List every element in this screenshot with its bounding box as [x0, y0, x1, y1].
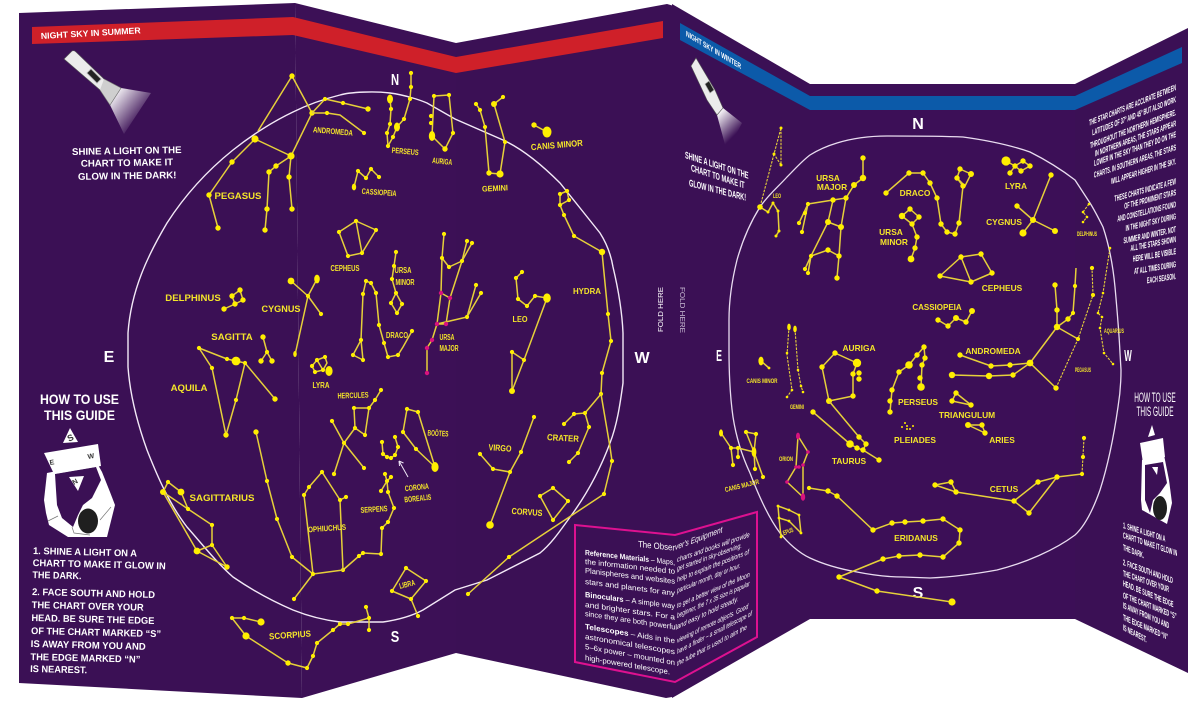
callout body text: left fold: 5–6x power – mounted on: [585, 642, 675, 667]
constellation: winter Triangulum: [939, 393, 995, 420]
constellation: Hercules: HERCULES: [337, 390, 369, 401]
text: star chart accuracy note: IN NORTHERN AREAS, THE STARS APPEAR: [1095, 120, 1176, 159]
text: star chart accuracy note: THE STAR CHARTS ARE ACCURATE BETWEEN: [1089, 84, 1176, 128]
text: winter numbered steps: 2. FACE SOUTH AND HOLD: [1123, 559, 1173, 586]
text: numbered steps: THE CHART OVER YOUR: [32, 600, 144, 614]
text: winter numbered steps: OF THE CHART MARKED “S”: [1123, 592, 1177, 622]
constellation: Perseus: [387, 73, 419, 157]
winter band title: NIGHT SKY IN WINTER: [686, 30, 741, 71]
callout body text: left fold: Binoculars – A simple way: [585, 590, 675, 611]
constellation: winter Ursa Minor: [879, 209, 919, 262]
callout title: [638, 524, 723, 553]
constellation: winter Aries: [965, 422, 1015, 445]
constellation: winter Lyra: [1001, 156, 1030, 191]
constellation: Auriga: AURIGA: [432, 156, 453, 167]
callout title: ver's Equipment: [675, 524, 723, 552]
text: winter numbered steps: 1. SHINE A LIGHT ON A: [1123, 522, 1165, 544]
constellation: Corvus: [511, 488, 568, 520]
callout body text: right fold: get started in sky-observing.: [677, 542, 742, 573]
constellation: Ophiuchus: OPHIUCHUS: [308, 523, 347, 534]
constellation: Ursa Minor: [391, 252, 415, 313]
constellation: Lyra: LYRA: [312, 381, 330, 390]
callout body text: right fold: viewing of remote objects. Good: [677, 603, 748, 645]
constellation: Cassiopeia: [352, 169, 397, 198]
text: prominent stars note: AND CONSTELLATIONS FOUND: [1117, 201, 1176, 224]
callout body text: right fold: to get a better view of the Moon: [677, 571, 750, 610]
constellation: Gemini: GEMINI: [482, 183, 508, 194]
callout body text: left fold: since they are both powerful: [585, 609, 677, 632]
constellation: winter Lepus: [778, 506, 801, 538]
constellation: winter Cassiopeia: CASSIOPEIA: [912, 303, 962, 312]
constellation: Canis Minor: CANIS MINOR: [530, 138, 584, 152]
fold here marker: winter: FOLD HERE: [678, 287, 685, 333]
constellation: winter Perseus: PERSEUS: [898, 397, 938, 407]
constellation: winter Aries: ARIES: [989, 435, 1015, 445]
constellation: Ursa Major: [427, 234, 481, 373]
constellation: winter Orion: [779, 433, 808, 501]
constellation: winter Canis Major: CANIS MAJOR: [724, 479, 760, 494]
constellation: winter Cygnus: [986, 175, 1058, 237]
text: winter numbered steps: THE EDGE MARKED “N”: [1123, 614, 1168, 643]
constellation: Ursa Minor: MINOR: [396, 278, 415, 287]
constellation: winter Aquarius: [1098, 248, 1124, 364]
callout body text: left fold: and brighter stars. For a: [585, 600, 676, 622]
callout body text: right fold: help to explain the positions of: [677, 548, 750, 584]
callout body text: right fold: have a finder – a small telescope of: [677, 610, 753, 656]
heading: how to use this guide: [40, 392, 119, 423]
callout title: The Obser: [638, 539, 675, 553]
constellation: Sagittarius: [160, 482, 255, 567]
constellation: winter Ursa Minor: MINOR: [880, 237, 908, 247]
text: shine a light instruction: CHART TO MAKE IT: [81, 157, 173, 170]
icon: winter flashlight: [691, 58, 742, 152]
constellation: Ursa Major: MAJOR: [440, 344, 459, 353]
constellation: Ursa Minor: URSA: [394, 266, 412, 275]
compass letters: summer: E: [104, 349, 115, 366]
constellation: Cassiopeia: CASSIOPEIA: [361, 187, 397, 198]
text: winter shine a light instruction: [685, 150, 749, 203]
text: prominent stars note: HERE WILL BE VISIBLE: [1133, 248, 1176, 264]
constellation: winter Andromeda and Pegasus: ANDROMEDA: [965, 346, 1021, 356]
callout body text: left fold: the information needed to: [585, 557, 675, 576]
text: numbered steps: IS AWAY FROM YOU AND: [31, 639, 146, 653]
icon: summer flashlight: [64, 51, 151, 134]
text: winter numbered steps: HEAD. BE SURE THE EDGE: [1123, 580, 1174, 610]
constellation: Cygnus: [262, 275, 321, 357]
compass letters: summer: S: [391, 629, 400, 646]
constellation: winter Cetus: [935, 438, 1084, 513]
constellation: winter Lyra: LYRA: [1005, 181, 1027, 191]
text: winter numbered steps: [1123, 522, 1177, 645]
icon: person holding chart overhead: N: [72, 478, 79, 487]
blue winter band: [680, 23, 1182, 110]
constellation: winter Draco: [886, 169, 974, 234]
constellation: winter Cygnus: CYGNUS: [986, 217, 1022, 227]
callout body text: right fold: and easy to hold steady.: [677, 595, 738, 631]
constellation: Andromeda: [312, 99, 368, 138]
compass letters: winter: [716, 116, 1132, 602]
text: numbered steps: 1. SHINE A LIGHT ON A: [33, 546, 137, 560]
constellation: winter Canis Minor: [746, 357, 778, 385]
constellation: winter Auriga: AURIGA: [842, 343, 876, 353]
text: prominent stars note: THESE CHARTS INDICATE A FEW: [1114, 177, 1176, 204]
compass letters: winter: S: [913, 585, 924, 602]
constellation: Sagitta: [211, 332, 272, 361]
text: winter numbered steps: THE CHART OVER YOUR: [1123, 570, 1169, 595]
constellation: winter Gemini: GEMINI: [790, 404, 804, 411]
constellation: Pegasus: PEGASUS: [215, 191, 262, 202]
constellation: winter Gemini: [787, 324, 804, 411]
constellation: winter Lepus: LEPUS: [780, 527, 795, 538]
constellation: winter Cepheus: [940, 254, 1023, 293]
constellation: Delphinus: DELPHINUS: [165, 293, 221, 304]
callout body text: right fold: particular month, day or hour.: [676, 562, 740, 595]
text: prominent stars note: [1114, 177, 1176, 286]
text: numbered steps: OF THE CHART MARKED “S”: [31, 626, 161, 640]
constellation: Aquila: [171, 348, 275, 435]
text: star chart accuracy note: WILL APPEAR HIGHER IN THE SKY.: [1111, 158, 1176, 187]
text: winter numbered steps: CHART TO MAKE IT GLOW IN: [1123, 532, 1177, 559]
icon: winter person holding chart overhead: [1140, 425, 1172, 524]
constellation: winter Draco: DRACO: [900, 188, 931, 198]
constellation: Scorpius: [232, 607, 369, 668]
text: shine a light instruction: SHINE A LIGHT ON THE: [72, 145, 182, 158]
callout body text: left fold: high-powered telescope.: [585, 653, 670, 676]
constellation: winter Ursa Major: MAJOR: [817, 182, 847, 192]
callout body text: left fold: [585, 548, 677, 676]
panel: summer night sky sheet: [19, 3, 674, 698]
constellation: winter Andromeda and Pegasus: [949, 268, 1093, 388]
constellation: Andromeda: ANDROMEDA: [313, 125, 353, 138]
constellation: winter Leo: [757, 128, 781, 236]
text: star chart accuracy note: LOWER IN THE SKY THAN THEY DO ON THE: [1094, 131, 1176, 169]
fold here marker: summer: FOLD HERE: [658, 287, 665, 332]
compass letters: summer: W: [634, 350, 650, 367]
text: winter shine a light instruction: CHART TO MAKE IT: [691, 163, 745, 191]
text: prominent stars note: EACH SEASON.: [1147, 273, 1176, 286]
heading: winter how to use this guide: [1134, 390, 1176, 420]
compass letters: winter: W: [1124, 347, 1132, 365]
constellation: winter Ursa Major: [799, 158, 866, 278]
constellation: winter Taurus: [813, 401, 879, 466]
callout: the observer's equipment: [575, 512, 757, 682]
constellation: Libra: [392, 568, 426, 616]
text: numbered steps: THE EDGE MARKED “N”: [30, 652, 141, 666]
constellation: Hercules: [332, 390, 381, 474]
constellation: Draco: DRACO: [386, 331, 408, 340]
constellation: Crater: [547, 394, 601, 462]
constellation: Virgo: VIRGO: [488, 442, 512, 454]
constellation: Pegasus: [209, 76, 312, 230]
constellation: Leo: [509, 272, 551, 394]
text: numbered steps: CHART TO MAKE IT GLOW IN: [33, 558, 166, 572]
winter chart boundary: [729, 136, 1121, 578]
constellation: winter Perseus: [890, 347, 938, 412]
text: prominent stars note: IN THE NIGHT SKY DURING: [1126, 213, 1176, 234]
constellation: Perseus: PERSEUS: [391, 146, 419, 157]
constellation: Ursa Major: URSA: [440, 333, 455, 342]
constellation: Corona Borealis: CORONA: [404, 482, 429, 493]
constellation: winter Andromeda and Pegasus: PEGASUS: [1075, 367, 1091, 374]
constellation: Cygnus: CYGNUS: [262, 304, 301, 315]
constellation: winter Delphinus: [1077, 204, 1097, 238]
text: prominent stars note: SUMMER AND WINTER. NOT: [1124, 226, 1176, 246]
text: numbered steps: [30, 546, 166, 678]
text: star chart accuracy note: LATITUDES OF 37° AND 45° BUT ALSO WORK: [1092, 94, 1176, 138]
constellation: winter Ursa Minor: URSA: [879, 227, 903, 237]
constellation: winter Aquarius: AQUARIUS: [1104, 328, 1124, 335]
text: winter shine a light instruction: GLOW IN THE DARK!: [689, 178, 746, 203]
text: star chart accuracy note: [1089, 84, 1176, 187]
constellation: Corona Borealis: BOREALIS: [404, 493, 432, 504]
panel: winter night sky sheet: [672, 4, 1188, 698]
constellation: Lyra: [312, 357, 333, 390]
constellation: Corvus: CORVUS: [511, 506, 543, 518]
constellation: winter Pleiades: PLEIADES: [894, 435, 936, 445]
text: star chart accuracy note: THROUGHOUT THE NORTHERN HEMISPHERE.: [1090, 109, 1176, 151]
text: numbered steps: IS NEAREST.: [30, 664, 88, 676]
constellation: Bootes: BOÖTES: [427, 428, 449, 439]
text: numbered steps: HEAD. BE SURE THE EDGE: [31, 613, 155, 627]
heading: how to use this guide: HOW TO USE: [40, 392, 119, 407]
constellation: Gemini: [476, 97, 508, 194]
callout body text: left fold: Planispheres and websites: [585, 566, 675, 586]
constellation: Hydra: [468, 191, 612, 594]
constellation: Crater: CRATER: [547, 432, 580, 444]
red summer band: [32, 17, 663, 73]
constellation: Hydra: HYDRA: [573, 286, 601, 296]
constellation: winter Leo: LEO: [773, 193, 781, 200]
constellation: Aquila: AQUILA: [171, 383, 207, 394]
heading: winter how to use this guide: HOW TO USE: [1134, 390, 1176, 406]
constellation: winter Delphinus: DELPHINUS: [1077, 231, 1097, 238]
callout body text: right fold: charts and books will provide: [677, 531, 750, 564]
arrow: corona borealis pointer: [399, 461, 408, 477]
callout body text: left fold: astronomical telescopes: [585, 632, 675, 656]
text: winter numbered steps: THE DARK.: [1123, 544, 1144, 561]
text: prominent stars note: AT ALL TIMES DURING: [1134, 261, 1176, 277]
constellation: Serpens: [343, 474, 394, 570]
text: winter numbered steps: IS AWAY FROM YOU AND: [1123, 602, 1169, 631]
constellation: winter Auriga: [822, 343, 876, 404]
constellation: Ophiuchus: [256, 432, 347, 599]
constellation: Draco: [353, 281, 412, 360]
constellation: winter Canis Major: [719, 429, 763, 494]
constellation: winter Cassiopeia: [912, 303, 975, 326]
compass letters: winter: N: [912, 116, 924, 133]
icon: person holding chart overhead: S: [66, 432, 75, 444]
constellation: Delphinus: [165, 290, 243, 309]
constellation: winter Triangulum: TRIANGULUM: [939, 410, 995, 420]
compass letters: winter: E: [716, 346, 722, 365]
constellation: Sagitta: SAGITTA: [211, 332, 253, 343]
icon: person holding chart overhead: E: [49, 459, 55, 467]
summer band title: NIGHT SKY IN SUMMER: [41, 25, 142, 41]
constellation: Auriga: [429, 95, 453, 167]
constellation: winter Orion: ORION: [779, 456, 793, 463]
text: star chart accuracy note: CHARTS. IN SOUTHERN AREAS, THE STARS: [1094, 144, 1176, 180]
constellation: winter Canis Minor: CANIS MINOR: [746, 378, 778, 385]
constellation: Corona Borealis: [382, 437, 432, 504]
constellation: winter Taurus: TAURUS: [832, 456, 867, 466]
constellation: Virgo: [480, 417, 534, 529]
constellation: Scorpius: SCORPIUS: [269, 629, 311, 641]
heading: how to use this guide: THIS GUIDE: [44, 408, 115, 423]
callout body text: left fold: Reference Materials – Maps,: [585, 548, 675, 567]
constellation: winter Cetus: CETUS: [990, 484, 1019, 494]
constellation: Libra: LIBRA: [398, 578, 416, 591]
constellation: winter Eridanus: ERIDANUS: [894, 533, 938, 543]
constellation: winter Ursa Major: URSA: [816, 173, 840, 183]
compass letters: summer: N: [391, 70, 399, 88]
callout body text: left fold: stars and planets for any: [585, 577, 675, 598]
constellation: Canis Minor: [530, 125, 584, 152]
text: shine a light instruction: GLOW IN THE DARK!: [78, 170, 177, 183]
constellation: winter Eridanus: [809, 488, 960, 606]
text: prominent stars note: OF THE PROMINENT STARS: [1124, 189, 1176, 212]
constellation: Serpens: SERPENS: [360, 504, 388, 515]
callout body text: right fold: [676, 531, 753, 668]
text: shine a light instruction: [72, 145, 183, 183]
constellation: Leo: LEO: [512, 315, 528, 324]
text: winter shine a light instruction: SHINE A LIGHT ON THE: [685, 150, 749, 181]
compass letters: summer: [104, 70, 650, 646]
text: numbered steps: 2. FACE SOUTH AND HOLD: [32, 587, 155, 601]
callout body text: left fold: Telescopes – Aids in the: [585, 622, 675, 645]
text: numbered steps: THE DARK.: [32, 570, 82, 582]
icon: person holding chart overhead: W: [87, 453, 95, 461]
heading: winter how to use this guide: THIS GUIDE: [1136, 404, 1174, 420]
constellation: winter Cepheus: CEPHEUS: [982, 283, 1023, 293]
callout body text: right fold: beginner, the 7 x 35 size is popular: [677, 580, 750, 620]
constellation: winter Pleiades: [894, 423, 936, 445]
constellation: Sagittarius: SAGITTARIUS: [190, 493, 255, 504]
constellation: Cepheus: CEPHEUS: [330, 264, 360, 273]
callout body text: right fold: the tube that is used to aim the: [677, 624, 747, 668]
icon: person holding chart overhead: [44, 428, 115, 537]
constellation: Cepheus: [330, 221, 376, 273]
constellation: Bootes: [403, 409, 449, 472]
summer chart boundary: [128, 92, 623, 622]
text: winter numbered steps: IS NEAREST.: [1123, 624, 1147, 645]
text: prominent stars note: ALL THE STARS SHOWN: [1130, 236, 1176, 254]
